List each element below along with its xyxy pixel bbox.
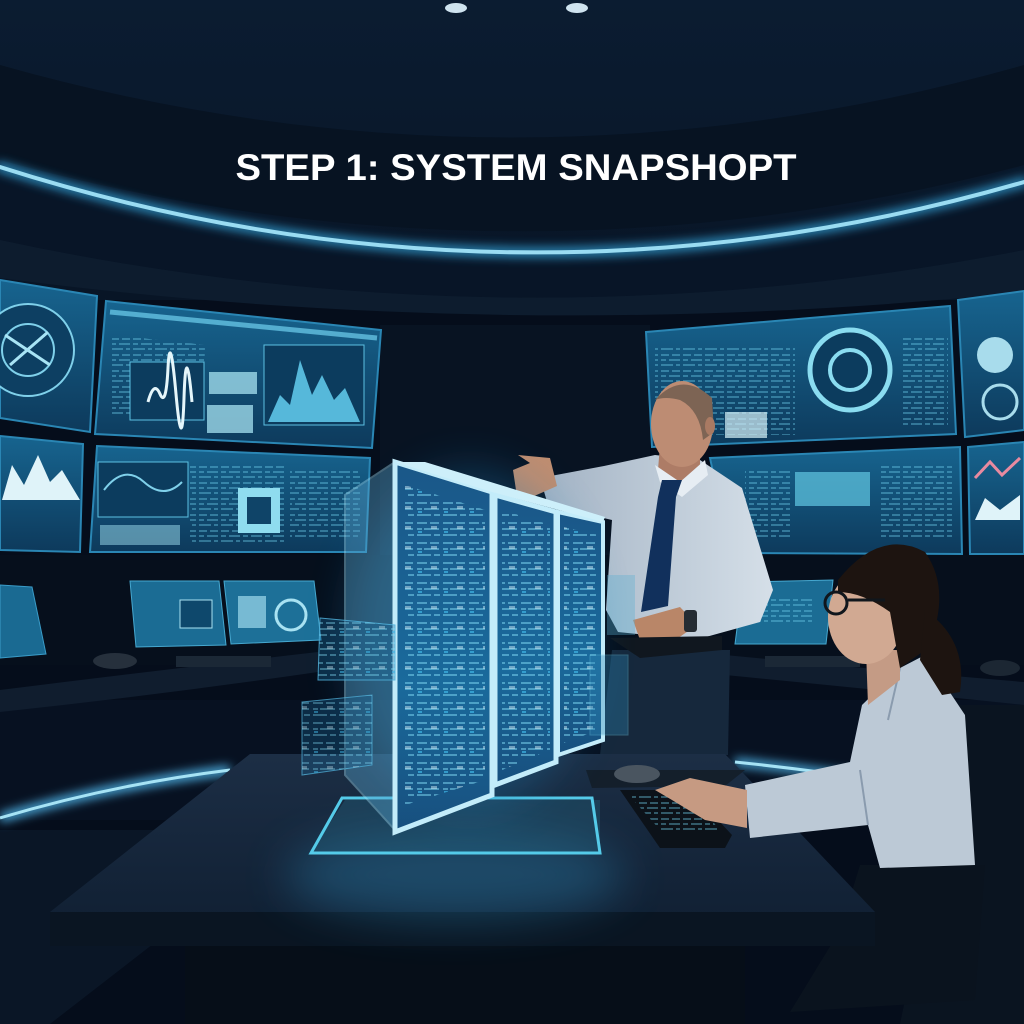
panel: lower right wall screens — [710, 442, 1024, 554]
man trousers — [600, 650, 730, 755]
table glow reflection — [285, 830, 625, 920]
man head — [651, 381, 713, 467]
man neck — [658, 445, 700, 488]
woman shirt and arm — [745, 655, 975, 868]
panel: lower left wall screens — [0, 436, 370, 552]
woman ponytail — [920, 610, 961, 695]
hologram server rack — [302, 462, 635, 832]
woman glasses — [825, 592, 885, 614]
keyboard — [620, 790, 732, 848]
man watch — [684, 610, 697, 632]
panel: upper right wall screens — [646, 291, 1024, 447]
woman face — [828, 570, 904, 664]
man belt — [610, 636, 722, 658]
mouse pad and mouse — [586, 770, 745, 788]
man pointing hand — [513, 455, 557, 497]
man shirt and arms — [540, 455, 773, 640]
curved ceiling light strip — [0, 167, 1024, 252]
man lower hand — [633, 607, 697, 645]
table — [50, 754, 875, 1024]
panel: upper left wall screens — [0, 280, 381, 448]
woman chair and legs — [790, 705, 1024, 1024]
man tie — [641, 480, 682, 612]
ceiling lights — [445, 3, 588, 13]
man standing — [513, 381, 773, 755]
woman neck — [866, 650, 900, 705]
woman hair — [838, 544, 939, 668]
woman seated — [655, 544, 975, 868]
woman hands — [655, 778, 747, 828]
floor glow strips — [0, 762, 980, 818]
back console desks and monitors — [0, 580, 1024, 712]
hologram floor outline — [310, 800, 600, 853]
title: STEP 1: SYSTEM SNAPSHOPT — [236, 147, 797, 188]
man collar — [655, 460, 708, 497]
woman shirt fold — [860, 668, 900, 825]
